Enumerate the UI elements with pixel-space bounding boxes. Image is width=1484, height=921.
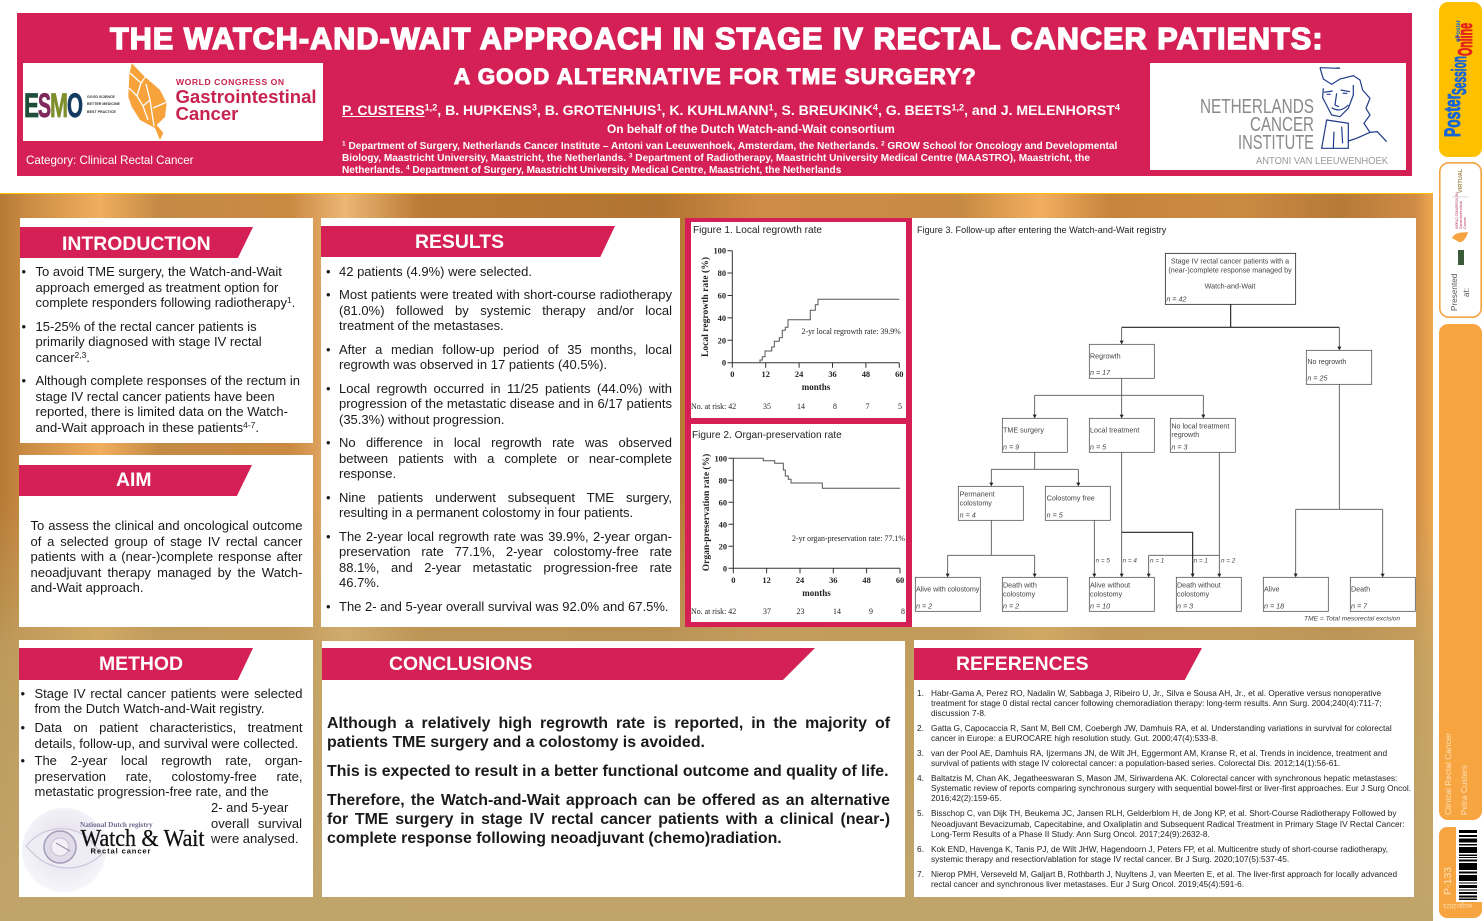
text: introduction bullets: stage IV rectal cancer patients have been bbox=[36, 388, 275, 404]
chart: figure 1 local regrowth rate: 24 bbox=[795, 370, 804, 379]
category label: Category: Clinical Rectal Cancer bbox=[26, 154, 194, 166]
box: death with colostomy: Death with bbox=[1003, 582, 1037, 590]
text: results bullets: After a median follow-up period of 35 months, local bbox=[339, 342, 672, 357]
box: death with colostomy bbox=[1002, 577, 1067, 611]
text: conclusions: patients TME surgery and a colostomy is avoided. bbox=[327, 734, 705, 750]
text: conclusions: complete response following neoadjuvant (chemo)radiation. bbox=[327, 830, 782, 846]
logo wordmark bbox=[176, 77, 317, 124]
chart: figure 1 local regrowth rate: 60 bbox=[895, 370, 903, 379]
chart: figure 2 organ-preservation rate: 0 bbox=[731, 576, 735, 585]
text: introduction bullets: complete responders following radiotherapy1. bbox=[36, 295, 295, 310]
text: results bullets: The 2- and 5-year overall survival was 92.0% and 67.5%. bbox=[339, 599, 669, 614]
text: reference list: discussion 7-8. bbox=[931, 708, 986, 718]
text: reference list: 2. bbox=[917, 723, 924, 733]
sidebar: poster number and barcode tab: wcgic2021 bbox=[1442, 902, 1473, 909]
icon: ESMO wordmark: BEST PRACTICE bbox=[87, 110, 117, 114]
box: death bbox=[1350, 577, 1415, 611]
logo wordmark: INSTITUTE bbox=[1238, 132, 1314, 154]
flow counts: n = 4 bbox=[1123, 558, 1137, 565]
box: TME surgery bbox=[1002, 418, 1067, 452]
text: aim: patients with a (near-)complete response after bbox=[30, 549, 302, 564]
icon: wheat leaf bbox=[128, 63, 167, 140]
text: aim: and-Wait approach. bbox=[30, 580, 143, 595]
poster title: THE WATCH-AND-WAIT APPROACH IN STAGE IV RECTAL CANCER PATIENTS: bbox=[110, 22, 1324, 56]
chart: figure 1 local regrowth rate: 2-yr local regrowth rate: 39.9% bbox=[802, 327, 901, 336]
heading: aim: AIM bbox=[116, 469, 152, 491]
text: reference list: Gatta G, Capocaccia R, Sant M, Bell CM, Coebergh JW, Damhuis RA, et al. Understanding variations in survival for colorectal bbox=[931, 723, 1392, 733]
sidebar: poster session online tab: ePoster bbox=[1455, 20, 1462, 42]
icon: ESMO wordmark: O bbox=[67, 87, 83, 125]
text: method bullets: Stage IV rectal cancer patients were selected bbox=[34, 686, 302, 700]
text: introduction bullets: primarily diagnosed with stage IV rectal bbox=[36, 334, 262, 349]
box: death without colostomy bbox=[1176, 577, 1241, 611]
box: regrowth: n = 17 bbox=[1090, 369, 1111, 377]
sidebar: poster session online tab bbox=[1439, 2, 1482, 157]
chart: figure 2 organ-preservation rate: 40 bbox=[719, 520, 727, 529]
heading: introduction: INTRODUCTION bbox=[62, 233, 211, 255]
sidebar: presented at virtual tab: Gastrointestinal bbox=[1459, 201, 1463, 229]
box: no local treatment regrowth bbox=[1170, 418, 1235, 452]
text: method continuation: overall survival bbox=[211, 816, 302, 830]
box: permanent colostomy: Permanent bbox=[960, 491, 995, 499]
chart: figure 1 local regrowth rate: No. at risk: 42 bbox=[691, 402, 736, 411]
text: introduction bullets: and-Wait approach in these patients4-7. bbox=[36, 419, 259, 434]
affiliations: 1 Department of Surgery, Netherlands Cancer Institute – Antoni van Leeuwenhoek, Amsterdam, the Netherlands. 2 GROW School for Oncology and Developmental bbox=[342, 140, 1117, 152]
box: regrowth bbox=[1089, 344, 1154, 378]
chart: figure 2 organ-preservation rate: No. at risk: 42 bbox=[691, 607, 736, 616]
box: stage IV patients: (near-)complete response managed by bbox=[1168, 266, 1292, 274]
chart: figure 2 organ-preservation rate: 23 bbox=[797, 607, 804, 616]
logo wordmark: ANTONI VAN LEEUWENHOEK bbox=[1256, 156, 1388, 167]
text: reference list: Baltatzis M, Chan AK, Jegatheeswaran S, Mason JM, Siriwardena AK. Colorectal cancer with synchronous hepatic metastases: bbox=[931, 773, 1397, 783]
box: death with colostomy: colostomy bbox=[1003, 590, 1036, 598]
box: stage IV patients: Stage IV rectal cancer patients with a bbox=[1171, 258, 1289, 266]
chart: figure 1 local regrowth rate: 0 bbox=[722, 359, 726, 368]
text: conclusions: Although a relatively high regrowth rate is reported, in the majority of bbox=[327, 714, 890, 732]
text: results bullets: Local regrowth occurred in 11/25 patients (44.0%) with bbox=[339, 381, 672, 396]
chart: figure 2 organ-preservation rate bbox=[691, 424, 906, 622]
subtitle: A GOOD ALTERNATIVE FOR TME SURGERY? bbox=[454, 64, 977, 89]
affiliations: Netherlands. 4 Department of Surgery, Maastricht University Medical Centre, Maastricht, the Netherlands bbox=[342, 164, 841, 176]
text: reference list: 7. bbox=[917, 869, 924, 879]
text: reference list: 1. bbox=[917, 688, 924, 698]
chart: figure 2 organ-preservation rate: Figure 2. Organ-preservation rate bbox=[692, 430, 842, 441]
box: no regrowth: No regrowth bbox=[1307, 358, 1346, 366]
icon: ESMO wordmark: M bbox=[50, 87, 68, 125]
sidebar: poster number and barcode tab bbox=[1439, 827, 1482, 918]
text: results bullets: (35.3%) without progression. bbox=[339, 412, 504, 427]
flow counts: n = 2 bbox=[1221, 558, 1236, 565]
text: conclusions: This is expected to result in a better functional outcome and quality of life. bbox=[327, 762, 889, 780]
text: • bbox=[326, 599, 331, 614]
text: conclusions bbox=[327, 714, 890, 846]
chart: figure 2 organ-preservation rate: 14 bbox=[833, 607, 841, 616]
chart: figure 1 local regrowth rate: 0 bbox=[730, 370, 734, 379]
icon: eye with clock bbox=[22, 808, 106, 892]
chart: figure 1 local regrowth rate: 14 bbox=[797, 402, 805, 411]
chart: figure 1 local regrowth rate bbox=[691, 222, 906, 418]
sidebar: presented at virtual tab bbox=[1439, 162, 1482, 318]
icon: ESMO wordmark: BETTER MEDICINE bbox=[87, 102, 121, 106]
text: • bbox=[20, 686, 25, 700]
chart: figure 1 local regrowth rate: 36 bbox=[828, 370, 837, 379]
text: introduction bullets bbox=[22, 264, 300, 434]
chart: figure 1 local regrowth rate: 7 bbox=[866, 402, 870, 411]
chart: figure 1 local regrowth rate: 100 bbox=[713, 247, 726, 256]
heading: method bbox=[19, 648, 253, 680]
box: colostomy free bbox=[1045, 486, 1110, 520]
box: alive bbox=[1263, 577, 1328, 611]
text: results bullets: response. bbox=[339, 466, 396, 481]
chart: figure 1 local regrowth rate: 20 bbox=[718, 336, 726, 345]
text: conclusions: for TME surgery in stage IV rectal cancer patients with a clinical (near-) bbox=[327, 810, 890, 828]
icon: ESMO wordmark: GOOD SCIENCE bbox=[87, 95, 116, 99]
authors: P. CUSTERS1,2, B. HUPKENS3, B. GROTENHUIS1, K. KUHLMANN1, S. BREUKINK4, G. BEETS1,2, and J. MELENHORST4 bbox=[342, 102, 1120, 118]
panel: results bbox=[321, 218, 680, 627]
text: results bullets: (81.0%) followed by systemic therapy and/or local bbox=[339, 303, 672, 318]
text: results bullets: The 2-year local regrowth rate was 39.9%, 2-year organ- bbox=[339, 529, 672, 544]
box: permanent colostomy: colostomy bbox=[960, 499, 992, 507]
text: method continuation: were analysed. bbox=[211, 831, 298, 846]
text: reference list: 3. bbox=[917, 748, 924, 758]
text: • bbox=[20, 720, 25, 735]
heading: introduction bbox=[20, 227, 253, 258]
logo wordmark: Gastrointestinal bbox=[176, 86, 317, 107]
text: • bbox=[20, 753, 25, 768]
box: death without colostomy: colostomy bbox=[1177, 590, 1210, 598]
box: no local treatment regrowth: n = 3 bbox=[1171, 443, 1187, 451]
poster background bbox=[0, 193, 1433, 921]
chart: flow diagram bbox=[914, 252, 1416, 623]
text: aim bbox=[30, 518, 302, 595]
box: no regrowth: n = 25 bbox=[1307, 375, 1327, 383]
text: aim: neoadjuvant therapy managed by the Watch- bbox=[30, 564, 302, 580]
box: stage IV patients: n = 42 bbox=[1166, 295, 1186, 303]
sidebar: presented at virtual tab: VIRTUAL bbox=[1458, 168, 1464, 193]
text: results bullets: No difference in local regrowth rate was observed bbox=[339, 435, 672, 450]
text: aim: To assess the clinical and oncological outcome bbox=[30, 518, 302, 533]
box: local treatment: n = 5 bbox=[1090, 443, 1106, 451]
text: introduction bullets: 15-25% of the rectal cancer patients is bbox=[36, 318, 257, 334]
text: reference list: 2016;42(2):159-65. bbox=[931, 793, 1001, 803]
text: • bbox=[326, 490, 331, 505]
text: method bullets: metastatic progression-free rate, and the bbox=[34, 784, 269, 799]
panel: introduction bbox=[20, 218, 313, 443]
box: death without colostomy: Death without bbox=[1177, 582, 1221, 590]
box: death: Death bbox=[1351, 586, 1370, 594]
box: alive without colostomy bbox=[1089, 577, 1154, 611]
text: • bbox=[326, 529, 331, 544]
text: reference list: Kok END, Havenga K, Tanis PJ, de Wilt JHW, Hagendoorn J, Peters FP, et al. Multicentre study of short-course radiotherapy, bbox=[931, 844, 1388, 854]
text: • bbox=[326, 342, 331, 357]
sidebar: presented at virtual tab: WORLD CONGRESS ON bbox=[1455, 192, 1459, 229]
box: death: n = 7 bbox=[1351, 602, 1368, 610]
chart: figure 2 organ-preservation rate: 12 bbox=[762, 576, 771, 585]
chart: figure 2 organ-preservation rate: 0 bbox=[723, 564, 727, 573]
header banner bbox=[17, 13, 1412, 176]
box: permanent colostomy bbox=[958, 486, 1023, 520]
text: reference list: Nierop PMH, Verseveld M, Galjart B, Rothbarth J, Nuyltens J, van Meerten E, et al. The liver-first approach for locally advanced bbox=[931, 869, 1397, 879]
chart: figure 2 organ-preservation rate: 37 bbox=[763, 607, 771, 616]
text: introduction bullets: To avoid TME surgery, the Watch-and-Wait bbox=[36, 264, 282, 279]
chart: figure 1 local regrowth rate: 80 bbox=[718, 269, 726, 278]
text: results bullets: preservation rate 77.1%, 2-year colostomy-free rate bbox=[339, 544, 672, 559]
sidebar: poster number and barcode tab: P-133 bbox=[1442, 867, 1454, 895]
heading: conclusions: CONCLUSIONS bbox=[389, 653, 532, 675]
chart: figure 2 organ-preservation rate: 2-yr organ-preservation rate: 77.1% bbox=[792, 534, 905, 543]
chart: figure 1 local regrowth rate: 60 bbox=[718, 292, 726, 300]
chart: figure 2 organ-preservation rate: 60 bbox=[719, 498, 727, 507]
chart: figure 2 organ-preservation rate: 80 bbox=[719, 476, 727, 485]
icon: ESMO wordmark bbox=[24, 87, 121, 125]
text: reference list: treatment for stage 0 distal rectal cancer following chemoradiation therapy: long-term results. Ann Surg. 2004;240(4):711-7; bbox=[931, 698, 1382, 708]
text: results bullets bbox=[326, 264, 672, 614]
sidebar: presented at virtual tab: Presented bbox=[1450, 273, 1459, 311]
text: reference list: survival of patients with stage IV colorectal cancer: a population-based series. Colorectal Dis. 2012;14(1):56-61. bbox=[931, 758, 1340, 768]
box: alive with colostomy: n = 2 bbox=[916, 602, 932, 610]
box: no local treatment regrowth: No local treatment bbox=[1171, 422, 1229, 430]
panel: figure 3 flow diagram bbox=[912, 218, 1416, 627]
flow counts: n = 1 bbox=[1150, 558, 1164, 565]
text: • bbox=[326, 287, 331, 302]
box: TME surgery: TME surgery bbox=[1003, 426, 1044, 434]
heading: references bbox=[914, 648, 1202, 680]
text: method bullets: preservation rate, colostomy-free rate, bbox=[34, 768, 302, 784]
text: • bbox=[22, 373, 26, 388]
logo wordmark: WORLD CONGRESS ON bbox=[176, 77, 285, 87]
sidebar: category and author tab bbox=[1439, 324, 1482, 820]
text: • bbox=[326, 435, 331, 450]
affiliations: Biology, Maastricht University, Maastricht, the Netherlands. 3 Department of Radiotherapy, Maastricht University Medical Centre (MAASTRO), Maastricht, the bbox=[342, 152, 1090, 164]
box: alive without colostomy: colostomy bbox=[1090, 590, 1123, 598]
box: alive: n = 18 bbox=[1264, 602, 1284, 610]
text: reference list: Neoadjuvant Bevacizumab, Capecitabine, and Oxaliplatin and Subsequent Radical Treatment in Primary Stage IV Rectal Cancer: bbox=[931, 819, 1405, 829]
heading: conclusions bbox=[322, 648, 815, 680]
affiliations bbox=[342, 140, 1117, 176]
text: reference list: rectal cancer and synchronous liver metastases. Eur J Surg Oncol. 2019;45(4):591-6. bbox=[931, 879, 1244, 889]
chart: figure 2 organ-preservation rate: 100 bbox=[714, 454, 727, 463]
text: introduction bullets: cancer2,3. bbox=[36, 349, 90, 364]
chart: figure 2 organ-preservation rate: 9 bbox=[869, 607, 873, 616]
text: reference list: 6. bbox=[917, 844, 924, 854]
chart: figure 2 organ-preservation rate: 8 bbox=[901, 607, 905, 616]
registry wordmark: Rectal cancer bbox=[90, 846, 151, 856]
panel: aim bbox=[19, 455, 313, 627]
chart: figure 1 local regrowth rate: Local regrowth rate (%) bbox=[700, 257, 711, 357]
box: death without colostomy: n = 3 bbox=[1177, 602, 1193, 610]
footnote: TME = Total mesorectal excision bbox=[1304, 616, 1400, 623]
chart: figure 1 local regrowth rate: months bbox=[802, 382, 831, 392]
heading: aim bbox=[19, 465, 252, 496]
chart: figure 2 organ-preservation rate: 60 bbox=[896, 576, 904, 585]
logo wordmark: NETHERLANDS bbox=[1200, 96, 1314, 118]
logo wordmark: CANCER bbox=[1250, 114, 1314, 136]
logo wordmark: Cancer bbox=[176, 103, 238, 124]
text: method continuation: 2- and 5-year bbox=[211, 800, 288, 815]
text: reference list: Habr-Gama A, Perez RO, Nadalin W, Sabbaga J, Ribeiro U, Jr., Silva e Sousa AH, Jr., et al. Operative versus nonoperative bbox=[931, 688, 1381, 698]
box: stage IV patients bbox=[1165, 253, 1296, 304]
text: introduction bullets: approach emerged as treatment option for bbox=[36, 280, 278, 294]
panel: conclusions bbox=[322, 641, 905, 897]
text: reference list: cancer in Europe: a EUROCARE high resolution study. Gut. 2000;47(4):533-8. bbox=[931, 733, 1218, 743]
heading: figure 3: Figure 3. Follow-up after entering the Watch-and-Wait registry bbox=[917, 225, 1166, 235]
text: results bullets: 46.7%. bbox=[339, 575, 379, 590]
text: results bullets: Most patients were treated with short-course radiotherapy bbox=[339, 287, 672, 302]
text: reference list: van der Pool AE, Damhuis RA, Ijzermans JN, de Wilt JH, Eggermont AM, Kranse R, et al. Trends in incidence, treatment and bbox=[931, 748, 1387, 758]
text: method bullets: details, follow-up, and survival were collected. bbox=[34, 736, 298, 750]
flow counts bbox=[1096, 558, 1236, 565]
chart: figure 1 local regrowth rate: 40 bbox=[718, 314, 726, 323]
box: no regrowth bbox=[1306, 350, 1372, 384]
box: alive without colostomy: n = 10 bbox=[1090, 602, 1110, 610]
chart: figure 1 local regrowth rate: 8 bbox=[833, 402, 837, 411]
text: introduction bullets: reported, there is limited data on the Watch- bbox=[36, 404, 288, 419]
text: reference list: Systematic review of reports comparing synchronous surgery with sequential bowel-first or liver-first approaches. Eur J Surg Oncol. bbox=[931, 783, 1411, 793]
sidebar: presented at virtual tab: Cancer bbox=[1463, 216, 1467, 229]
registry wordmark: Watch & Wait bbox=[80, 826, 205, 852]
text: method bullets: The 2-year local regrowth rate, organ- bbox=[34, 753, 302, 768]
text: results bullets: between patients with a complete or near-complete bbox=[339, 451, 672, 466]
text: conclusions: Therefore, the Watch-and-Wait approach can be offered as an alternative bbox=[327, 792, 890, 808]
text: reference list: systemic therapy and resection/ablation for stage IV rectal cancer. Br J Surg. 2020;107(5):537-45. bbox=[931, 854, 1289, 864]
text: reference list bbox=[917, 688, 1411, 889]
sidebar: presented at virtual tab: at: bbox=[1462, 288, 1471, 297]
box: TME surgery: n = 9 bbox=[1003, 443, 1019, 451]
box: no local treatment regrowth: regrowth bbox=[1171, 431, 1199, 439]
heading: method: METHOD bbox=[99, 653, 183, 675]
text: introduction bullets: Although complete responses of the rectum in bbox=[36, 373, 300, 388]
chart: figure 1 local regrowth rate: 5 bbox=[898, 402, 902, 411]
text: results bullets: treatment of the metastases. bbox=[339, 318, 504, 333]
box: alive with colostomy bbox=[915, 577, 980, 611]
text: results bullets: 42 patients (4.9%) were selected. bbox=[339, 264, 532, 279]
flow counts: n = 1 bbox=[1194, 558, 1208, 565]
sidebar: poster session online tab: Session bbox=[1449, 56, 1471, 95]
box: stage IV patients: Watch-and-Wait bbox=[1205, 282, 1255, 290]
heading: results bbox=[321, 226, 615, 257]
text: reference list: 4. bbox=[917, 773, 924, 783]
text: aim: of a selected group of stage IV rectal cancer bbox=[30, 534, 302, 548]
box: alive: Alive bbox=[1264, 586, 1280, 594]
logo: ESMO World Congress on Gastrointestinal Cancer bbox=[23, 63, 323, 141]
text: • bbox=[326, 381, 331, 396]
chart: figure 1 local regrowth rate: Figure 1. Local regrowth rate bbox=[693, 225, 822, 236]
chart: figure 2 organ-preservation rate: 24 bbox=[796, 576, 805, 585]
box: colostomy free: Colostomy free bbox=[1047, 495, 1095, 503]
text: • bbox=[326, 264, 331, 279]
text: results bullets: regrowth was observed in 17 patients (40.5%). bbox=[339, 357, 607, 372]
logo: national Dutch registry Watch and Wait bbox=[22, 808, 205, 892]
chart: figure 2 organ-preservation rate: 36 bbox=[829, 576, 837, 585]
box: death with colostomy: n = 2 bbox=[1003, 602, 1019, 610]
text: reference list: Long-Term Results of a Phase II Study. Ann Surg Oncol. 2017;24(9):2632-8. bbox=[931, 829, 1210, 839]
text: results bullets: 88.1%, and 2-year metastatic progression-free rate bbox=[339, 560, 672, 575]
logo wordmark bbox=[1200, 96, 1388, 167]
box: local treatment bbox=[1089, 418, 1154, 452]
text: • bbox=[22, 318, 26, 334]
box: permanent colostomy: n = 4 bbox=[960, 512, 976, 520]
sidebar: category and author tab: Petra Custers bbox=[1459, 765, 1469, 815]
text: reference list: 5. bbox=[917, 808, 924, 818]
text: method bullets bbox=[20, 686, 302, 799]
panel: references bbox=[914, 640, 1414, 897]
box: regrowth: Regrowth bbox=[1090, 352, 1121, 360]
chart: figure 1 local regrowth rate: 35 bbox=[763, 402, 771, 411]
sidebar: poster session online tab: Poster bbox=[1440, 94, 1465, 137]
text: results bullets: resulting in a permanent colostomy in four patients. bbox=[339, 505, 633, 520]
box: local treatment: Local treatment bbox=[1090, 426, 1139, 434]
chart: figure 2 organ-preservation rate: months bbox=[802, 588, 831, 598]
text: reference list: Bisschop C, van Dijk TH, Beukema JC, Jansen RLH, Gelderblom H, de Jong KP, et al. Short-Course Radiotherapy Followed by bbox=[931, 808, 1396, 818]
text: • bbox=[22, 264, 26, 279]
consortium line: On behalf of the Dutch Watch-and-Wait consortium bbox=[607, 122, 895, 136]
registry wordmark: National Dutch registry bbox=[80, 821, 153, 829]
panel: method bbox=[19, 640, 313, 897]
text: method continuation bbox=[211, 800, 302, 846]
box: colostomy free: n = 5 bbox=[1047, 512, 1063, 520]
chart: figure 2 organ-preservation rate: 48 bbox=[862, 576, 871, 585]
chart: figure 1 local regrowth rate: 48 bbox=[862, 370, 870, 379]
heading: results: RESULTS bbox=[415, 231, 504, 253]
chart: figure 2 organ-preservation rate: 20 bbox=[719, 542, 727, 551]
sidebar: category and author tab: Clinical Rectal Cancer bbox=[1443, 733, 1453, 815]
text: method bullets: Data on patient characteristics, treatment bbox=[34, 720, 302, 735]
logo: Netherlands Cancer Institute bbox=[1150, 63, 1406, 170]
box: alive with colostomy: Alive with colostomy bbox=[916, 586, 980, 594]
text: method bullets: from the Dutch Watch-and-Wait registry. bbox=[34, 701, 264, 716]
icon: ESMO wordmark: S bbox=[38, 87, 51, 125]
icon: ESMO wordmark: E bbox=[24, 87, 39, 125]
heading: references: REFERENCES bbox=[956, 653, 1089, 675]
box: alive without colostomy: Alive without bbox=[1090, 582, 1130, 590]
flow counts: n = 5 bbox=[1096, 558, 1110, 565]
text: results bullets: progression of the metastatic disease and in 6/17 patients bbox=[339, 396, 672, 411]
text: results bullets: Nine patients underwent subsequent TME surgery, bbox=[339, 490, 672, 505]
chart: figure 1 local regrowth rate: 12 bbox=[762, 370, 770, 379]
chart: figure 2 organ-preservation rate: Organ-preservation rate (%) bbox=[701, 454, 712, 571]
panel: figures frame bbox=[685, 218, 912, 627]
icon: portrait of Leeuwenhoek bbox=[1320, 68, 1387, 148]
